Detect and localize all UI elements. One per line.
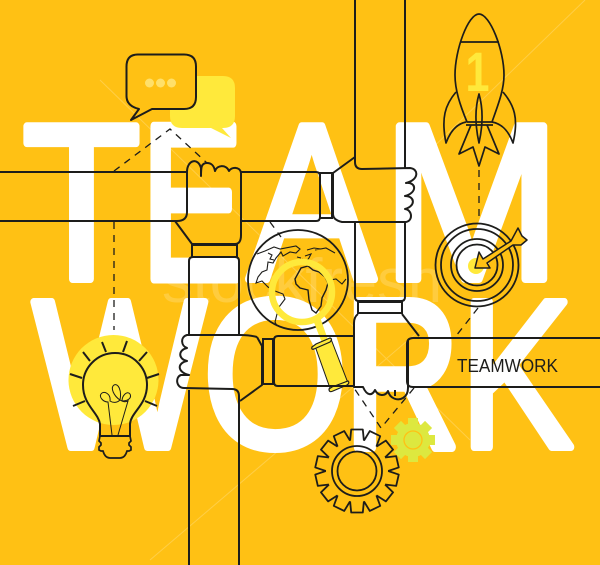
icon: rocket	[444, 14, 516, 166]
hand: bottom fist	[354, 314, 419, 399]
icon: target with arrow	[436, 224, 527, 306]
label: TEAMWORK: TEAMWORK	[457, 356, 558, 376]
heading: TEAM: E	[141, 79, 243, 327]
heading: TEAM: M	[382, 79, 561, 327]
arm: center-top horizontal	[241, 172, 320, 221]
arm: lower-left forearm	[189, 257, 239, 336]
watermark: stockfresh	[162, 247, 442, 316]
hand: cuff right-center	[358, 302, 402, 313]
icon: globe	[248, 230, 348, 330]
heading: TEAM	[22, 79, 561, 327]
heading: WORK: O	[202, 256, 348, 492]
dashed connectors	[114, 129, 479, 428]
hand: top arm with right fist	[333, 0, 416, 222]
heading: WORK: W	[33, 256, 206, 492]
icon: magnifier	[272, 262, 349, 392]
heading: WORK	[33, 256, 573, 492]
hand: cuff top-left	[192, 245, 237, 257]
arm: center-lower horizontal	[274, 336, 354, 386]
hand: cuff center-top	[320, 173, 332, 218]
icon: rocket: 1	[466, 40, 490, 103]
icon: light bulb	[68, 335, 159, 458]
icon: outlined speech bubble	[126, 54, 196, 120]
arm: right horizontal	[407, 338, 600, 387]
icon: small green gear	[391, 418, 435, 462]
heading: WORK: K	[460, 256, 573, 492]
arm: right-center vertical	[355, 222, 405, 301]
hand: cuff lower-left	[263, 339, 273, 384]
hand: left-pointing fist with lower arm	[177, 335, 262, 565]
heading: TEAM: A	[248, 79, 375, 327]
icon: large gear	[315, 430, 399, 512]
hand: left arm with raised fist	[0, 161, 241, 244]
heading: WORK: R	[344, 256, 460, 492]
icon: yellow speech bubble	[170, 76, 235, 138]
heading: TEAM: T	[22, 79, 140, 327]
